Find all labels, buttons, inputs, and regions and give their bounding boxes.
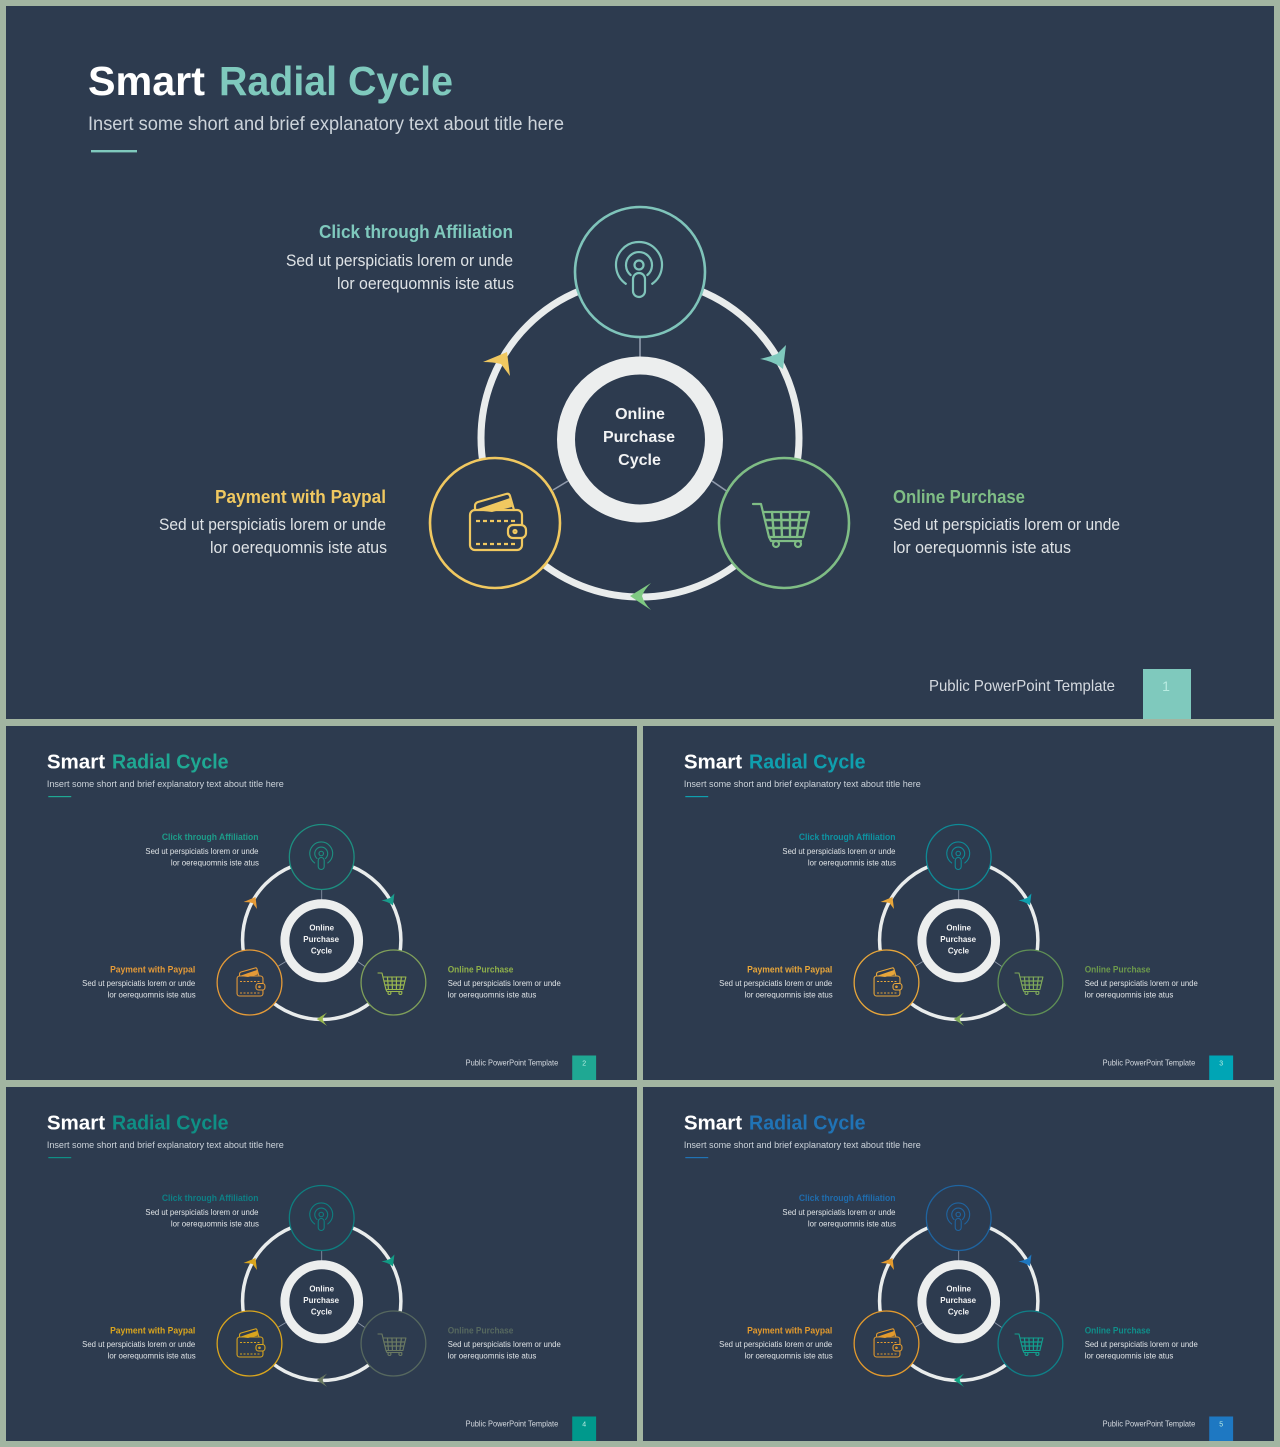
center ring with label: Cycle xyxy=(311,1307,333,1317)
label: click through affiliation: lor oerequomnis iste atus xyxy=(808,1219,896,1229)
title: Smart xyxy=(88,58,205,104)
radial cycle diagram xyxy=(430,207,849,610)
title xyxy=(684,1111,866,1135)
label: payment with paypal: Sed ut perspiciatis lorem or unde xyxy=(82,979,196,988)
label: online purchase xyxy=(448,1325,561,1361)
center ring with label xyxy=(285,1265,359,1339)
page number box: 1 xyxy=(1162,678,1170,694)
label: payment with paypal: Sed ut perspiciatis lorem or unde xyxy=(719,979,833,988)
connector: top xyxy=(639,336,641,358)
icon: podcast signal xyxy=(947,1203,970,1230)
icon: shopping cart xyxy=(1015,973,1043,994)
center ring with label xyxy=(285,904,359,978)
connector: right xyxy=(358,962,366,967)
label: click through affiliation: Sed ut perspiciatis lorem or unde xyxy=(782,1208,896,1217)
node: right xyxy=(719,458,849,588)
node: right xyxy=(998,950,1063,1015)
node: top xyxy=(289,824,354,890)
center ring with label: Cycle xyxy=(948,946,970,956)
radial cycle diagram xyxy=(217,824,426,1026)
center ring with label: Cycle xyxy=(618,452,661,469)
node: top xyxy=(575,207,705,337)
page number box xyxy=(1209,1416,1233,1441)
label: online purchase: lor oerequomnis iste atus xyxy=(1085,1351,1173,1361)
label: online purchase xyxy=(1085,964,1198,1000)
panel: slide 5 xyxy=(643,1087,1274,1441)
panel: slide 3 xyxy=(643,726,1274,1080)
title: Radial Cycle xyxy=(219,58,453,104)
label: payment with paypal: Payment with Paypal xyxy=(747,1325,832,1336)
subtitle: Insert some short and brief explanatory text about title here xyxy=(684,1140,921,1151)
label: click through affiliation: Sed ut perspiciatis lorem or unde xyxy=(145,847,259,856)
icon: wallet xyxy=(874,1329,902,1357)
label: online purchase: Online Purchase xyxy=(1085,964,1150,975)
icon: wallet xyxy=(470,494,526,550)
label: online purchase: Online Purchase xyxy=(448,1325,513,1336)
label: click through affiliation: Click through Affiliation xyxy=(319,222,513,242)
center ring with label xyxy=(922,1265,996,1339)
label: online purchase: lor oerequomnis iste atus xyxy=(893,539,1071,557)
title: Smart xyxy=(47,750,105,774)
center ring with label xyxy=(922,904,996,978)
node: left xyxy=(854,1311,919,1376)
icon: shopping cart xyxy=(378,1334,406,1356)
connector: left xyxy=(915,1322,923,1327)
label: payment with paypal: lor oerequomnis iste atus xyxy=(108,1351,196,1361)
page number box: 5 xyxy=(1219,1421,1223,1429)
arrow: bottom xyxy=(317,1374,327,1387)
label: online purchase: Sed ut perspiciatis lorem or unde xyxy=(893,516,1120,534)
arrow: right xyxy=(760,345,786,369)
arrow: bottom xyxy=(954,1374,964,1387)
subtitle: Insert some short and brief explanatory text about title here xyxy=(88,114,564,135)
label: online purchase: Sed ut perspiciatis lorem or unde xyxy=(1085,979,1198,988)
connector: top xyxy=(321,1250,323,1261)
label: payment with paypal: lor oerequomnis iste atus xyxy=(210,539,387,557)
arrow: bottom xyxy=(630,583,651,610)
page number box: 3 xyxy=(1219,1060,1223,1068)
footer text: Public PowerPoint Template xyxy=(929,678,1115,695)
arrow: left xyxy=(244,1258,257,1270)
title underline xyxy=(91,150,137,152)
icon: podcast signal xyxy=(310,842,333,870)
center ring with label: Online xyxy=(946,1284,972,1294)
label: online purchase: lor oerequomnis iste atus xyxy=(448,1351,536,1361)
radial cycle diagram xyxy=(854,1186,1063,1387)
connector: right xyxy=(995,1322,1003,1328)
label: payment with paypal: Sed ut perspiciatis lorem or unde xyxy=(719,1340,833,1349)
arrow: left xyxy=(244,897,257,909)
label: click through affiliation xyxy=(145,1193,259,1229)
page number box xyxy=(1143,669,1191,719)
panel: slide 2 xyxy=(6,726,637,1080)
center ring with label: Online xyxy=(946,923,972,933)
connector: left xyxy=(553,481,568,490)
label: online purchase: lor oerequomnis iste atus xyxy=(1085,990,1173,1000)
arrow: left xyxy=(881,897,894,909)
center ring with label: Online xyxy=(309,1284,335,1294)
title underline xyxy=(685,1157,708,1158)
node: top xyxy=(289,1186,354,1250)
label: online purchase xyxy=(893,487,1120,557)
node: left xyxy=(854,950,919,1015)
title xyxy=(88,58,453,104)
title: Radial Cycle xyxy=(749,1111,866,1135)
arrow: left xyxy=(881,1258,894,1270)
label: click through affiliation: Sed ut perspiciatis lorem or unde xyxy=(145,1208,259,1217)
arrow: left xyxy=(483,352,510,376)
label: online purchase: lor oerequomnis iste atus xyxy=(448,990,536,1000)
title: Radial Cycle xyxy=(112,1111,229,1135)
arrow: right xyxy=(1018,894,1031,906)
center ring with label: Purchase xyxy=(303,935,340,944)
label: payment with paypal: Sed ut perspiciatis lorem or unde xyxy=(82,1340,196,1349)
connector: left xyxy=(278,1322,286,1327)
title xyxy=(47,750,229,774)
center ring with label: Cycle xyxy=(948,1307,970,1317)
label: payment with paypal xyxy=(82,1325,196,1361)
icon: shopping cart xyxy=(1015,1334,1043,1356)
outer cycle ring xyxy=(243,860,401,1020)
icon: shopping cart xyxy=(378,973,406,994)
title: Radial Cycle xyxy=(749,750,866,774)
label: click through affiliation xyxy=(782,1193,896,1229)
label: click through affiliation: Click through Affiliation xyxy=(162,1193,258,1203)
icon: wallet xyxy=(874,968,902,996)
node: right xyxy=(361,950,426,1015)
title: Smart xyxy=(684,750,742,774)
label: click through affiliation: Sed ut perspiciatis lorem or unde xyxy=(782,847,896,856)
arrow: right xyxy=(381,1254,394,1266)
connector: top xyxy=(958,889,960,900)
connector: right xyxy=(358,1322,366,1328)
arrow: bottom xyxy=(317,1012,327,1026)
title underline xyxy=(685,796,708,797)
center ring with label xyxy=(566,366,714,514)
label: payment with paypal xyxy=(719,1325,833,1361)
title: Radial Cycle xyxy=(112,750,229,774)
panel: slide 4 xyxy=(6,1087,637,1441)
page number box: 2 xyxy=(582,1060,586,1068)
connector: right xyxy=(712,481,728,492)
label: online purchase: Online Purchase xyxy=(1085,1325,1150,1336)
label: click through affiliation: Click through Affiliation xyxy=(799,1193,895,1203)
footer text: Public PowerPoint Template xyxy=(1103,1058,1196,1068)
icon: podcast signal xyxy=(310,1203,333,1230)
subtitle: Insert some short and brief explanatory text about title here xyxy=(47,779,284,790)
title: Smart xyxy=(47,1111,105,1135)
icon: wallet xyxy=(237,1329,265,1357)
node: top xyxy=(926,824,991,890)
arrow: bottom xyxy=(954,1012,964,1026)
center ring with label: Cycle xyxy=(311,946,333,956)
page number box: 4 xyxy=(582,1421,586,1429)
connector: left xyxy=(915,962,923,966)
center ring with label: Purchase xyxy=(603,429,675,446)
outer cycle ring xyxy=(880,1222,1038,1380)
label: online purchase: Online Purchase xyxy=(893,487,1025,507)
label: online purchase: Sed ut perspiciatis lorem or unde xyxy=(448,979,561,988)
center ring with label: Purchase xyxy=(303,1296,340,1305)
label: click through affiliation: lor oerequomnis iste atus xyxy=(808,858,896,868)
footer text: Public PowerPoint Template xyxy=(1103,1419,1196,1429)
label: payment with paypal: lor oerequomnis iste atus xyxy=(745,990,833,1000)
label: click through affiliation: lor oerequomnis iste atus xyxy=(171,858,259,868)
label: online purchase: Sed ut perspiciatis lorem or unde xyxy=(1085,1340,1198,1349)
page number box xyxy=(572,1416,596,1441)
label: click through affiliation: lor oerequomnis iste atus xyxy=(171,1219,259,1229)
title underline xyxy=(48,1157,71,1158)
label: payment with paypal: lor oerequomnis iste atus xyxy=(108,990,196,1000)
footer text: Public PowerPoint Template xyxy=(466,1058,559,1068)
panel: slide 1 main xyxy=(6,6,1274,719)
radial cycle diagram xyxy=(217,1186,426,1387)
label: payment with paypal xyxy=(82,964,196,1000)
icon: podcast signal xyxy=(616,242,662,297)
label: payment with paypal xyxy=(719,964,833,1000)
label: click through affiliation xyxy=(782,832,896,868)
node: right xyxy=(998,1311,1063,1376)
connector: top xyxy=(958,1250,960,1261)
node: top xyxy=(926,1186,991,1250)
label: payment with paypal xyxy=(159,487,387,557)
node: left xyxy=(217,950,282,1015)
label: click through affiliation: Sed ut perspiciatis lorem or unde xyxy=(286,252,513,270)
page number box xyxy=(1209,1056,1233,1080)
title xyxy=(684,750,866,774)
label: payment with paypal: Payment with Paypal xyxy=(110,1325,195,1336)
label: online purchase xyxy=(1085,1325,1198,1361)
connector: right xyxy=(995,962,1003,967)
center ring with label: Online xyxy=(615,406,665,423)
subtitle: Insert some short and brief explanatory text about title here xyxy=(684,779,921,790)
label: payment with paypal: Payment with Paypal xyxy=(747,964,832,975)
label: click through affiliation xyxy=(145,832,259,868)
label: payment with paypal: Sed ut perspiciatis lorem or unde xyxy=(159,516,386,534)
connector: top xyxy=(321,889,323,900)
outer cycle ring xyxy=(880,860,1038,1020)
arrow: right xyxy=(1018,1254,1031,1266)
label: online purchase: Sed ut perspiciatis lorem or unde xyxy=(448,1340,561,1349)
outer cycle ring xyxy=(481,279,799,597)
subtitle: Insert some short and brief explanatory text about title here xyxy=(47,1140,284,1151)
footer text: Public PowerPoint Template xyxy=(466,1419,559,1429)
node: right xyxy=(361,1311,426,1376)
connector: left xyxy=(278,962,286,966)
label: click through affiliation: Click through Affiliation xyxy=(799,832,895,842)
label: click through affiliation: Click through Affiliation xyxy=(162,832,258,842)
label: payment with paypal: Payment with Paypal xyxy=(110,964,195,975)
label: payment with paypal: Payment with Paypal xyxy=(215,487,386,507)
icon: shopping cart xyxy=(753,504,809,547)
center ring with label: Purchase xyxy=(940,935,977,944)
label: online purchase xyxy=(448,964,561,1000)
arrow: right xyxy=(381,894,394,906)
label: online purchase: Online Purchase xyxy=(448,964,513,975)
center ring with label: Purchase xyxy=(940,1296,977,1305)
title underline xyxy=(48,796,71,797)
radial cycle diagram xyxy=(854,824,1063,1026)
icon: podcast signal xyxy=(947,842,970,870)
label: payment with paypal: lor oerequomnis iste atus xyxy=(745,1351,833,1361)
center ring with label: Online xyxy=(309,923,335,933)
icon: wallet xyxy=(237,968,265,996)
node: left xyxy=(217,1311,282,1376)
outer cycle ring xyxy=(243,1222,401,1380)
title xyxy=(47,1111,229,1135)
page number box xyxy=(572,1056,596,1080)
title: Smart xyxy=(684,1111,742,1135)
label: click through affiliation xyxy=(286,222,514,293)
node: left xyxy=(430,458,560,588)
label: click through affiliation: lor oerequomnis iste atus xyxy=(337,275,514,293)
